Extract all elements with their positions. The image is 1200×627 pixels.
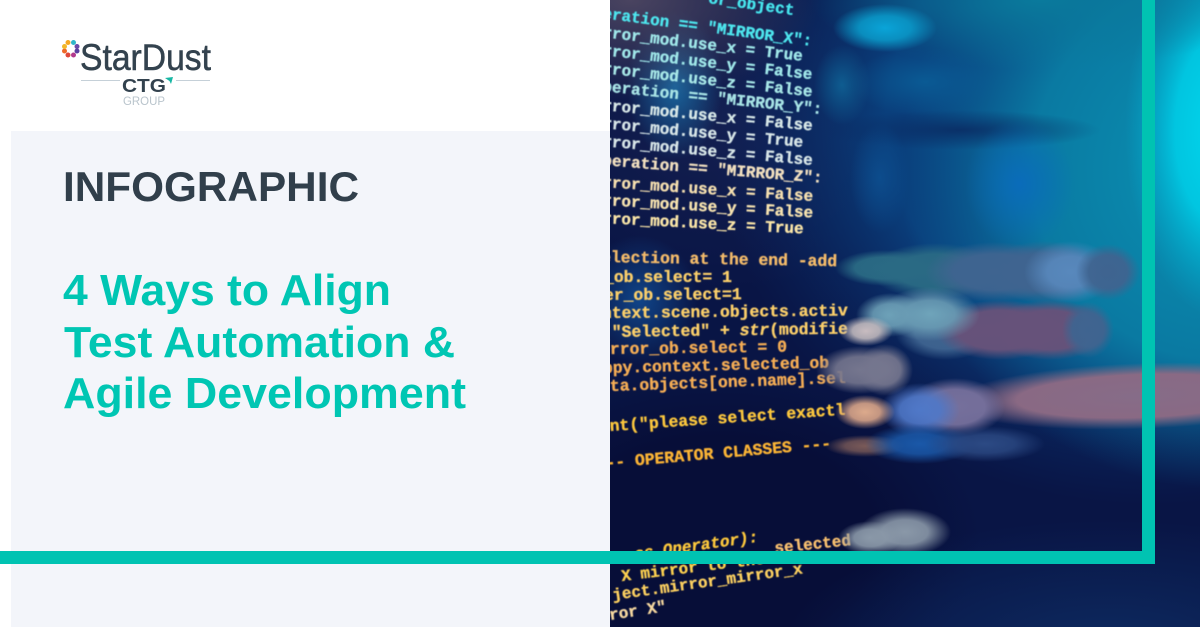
streak B xyxy=(895,304,995,360)
heading: INFOGRAPHIC: INFOGRAPHIC xyxy=(63,163,359,210)
code lines: cyan block: rror_mod.use_y = False xyxy=(601,42,813,84)
code lines: bottom block: ror X" xyxy=(608,598,668,625)
code lines: orange block: _ob.select= 1 xyxy=(603,268,732,287)
code lines: bottom block: selected xyxy=(774,532,852,558)
code lines: orange block: ta.objects[one.name].sel xyxy=(610,369,846,396)
code lines: orange block: nt("please select exactl xyxy=(609,401,846,436)
code lines: cyan block: rror_mod.use_x = False xyxy=(602,97,813,136)
logo divider lines xyxy=(81,80,210,81)
code lines: cyan block: rror_mod.use_z = False xyxy=(602,133,814,170)
code lines: cyan block xyxy=(601,0,823,239)
blurred bottom blob xyxy=(859,508,951,556)
photo background glow xyxy=(610,0,1200,627)
logo CTG: CTG xyxy=(122,76,166,96)
code lines: cyan block: rror_mod.use_x = False xyxy=(602,174,814,206)
code lines: orange block: er_ob.select=1 xyxy=(604,285,742,305)
code lines: bottom block: ss Operator): xyxy=(633,529,759,564)
streak E xyxy=(825,435,905,457)
blob C xyxy=(816,346,904,394)
code lines: orange block xyxy=(601,248,848,473)
title: 4 Ways to Align Test Automation and Agile Development: 4 Ways to Align xyxy=(63,267,391,315)
title: 4 Ways to Align Test Automation and Agile Development: Agile Development xyxy=(63,370,466,418)
logo wordmark: StarDust xyxy=(80,37,212,78)
logo GROUP: GROUP xyxy=(123,96,165,108)
code lines: orange block: bpy.context.selected_ob xyxy=(603,353,829,378)
blurred light streaks xyxy=(816,241,1200,556)
code lines: cyan block: rror_mod.use_y = False xyxy=(602,192,814,223)
code lines: orange block: election at the end -add xyxy=(601,248,837,271)
icon: CTG arrow xyxy=(165,77,173,84)
code lines: cyan block: peration == "MIRROR_Y": xyxy=(601,78,823,119)
code lines: cyan block: eration == "MIRROR_X": xyxy=(601,5,813,51)
code lines: orange block: ntext.scene.objects.activ xyxy=(602,301,848,323)
icon: colourful ring of dots xyxy=(62,40,80,58)
title: 4 Ways to Align Test Automation and Agile Development xyxy=(63,267,466,418)
streak A xyxy=(835,250,935,286)
logo: StarDust CTG Group xyxy=(62,37,212,108)
code lines: orange block: -- OPERATOR CLASSES --- xyxy=(605,434,832,473)
code lines: cyan block: rror_mod.use_z = False xyxy=(601,60,813,102)
title: 4 Ways to Align Test Automation and Agile Development: Test Automation & xyxy=(64,319,455,367)
panel: light grey title panel xyxy=(11,131,610,627)
code lines: bottom block: ject.mirror_mirror_x xyxy=(611,560,804,605)
streak D xyxy=(900,360,1200,432)
code lines: cyan block: peration == "MIRROR_Z": xyxy=(602,152,823,188)
code lines: cyan block: rror_mod.use_x = True xyxy=(601,24,804,66)
code lines: orange block: ("Selected" + str(modifie xyxy=(602,320,848,342)
code lines: orange block: rror_ob.select = 0 xyxy=(610,338,787,359)
code lines: bottom block xyxy=(608,529,852,625)
code lines: bottom block: X mirror to the xyxy=(620,551,766,586)
code lines: cyan block: rror_mod.use_y = True xyxy=(602,115,804,152)
photo: blurred code on screen xyxy=(601,0,1200,627)
code lines: cyan block: rror_mod.use_z = True xyxy=(602,210,804,239)
